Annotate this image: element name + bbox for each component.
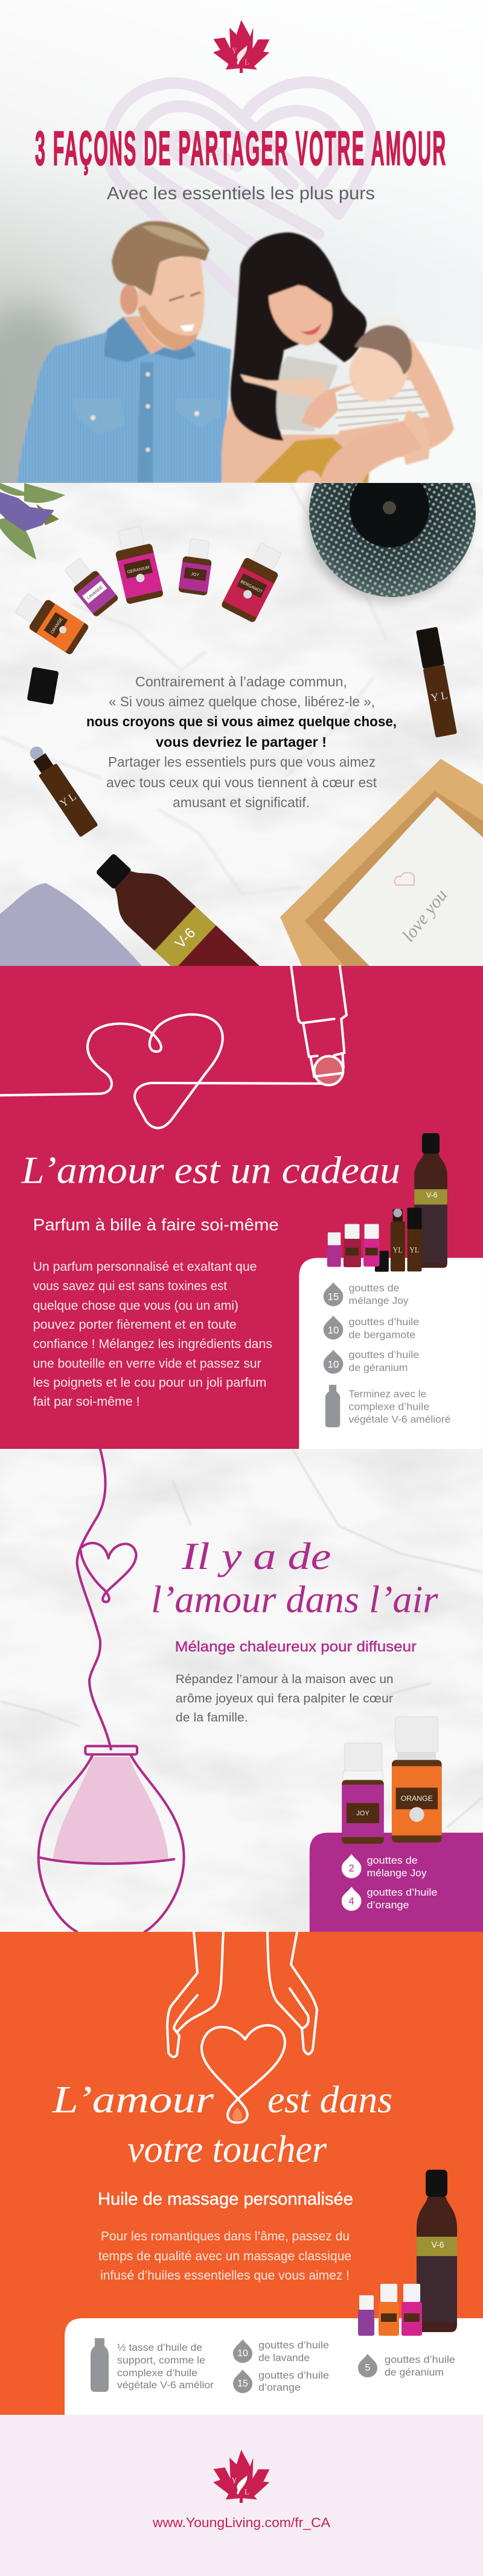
body text: arôme joyeux qui fera palpiter le cœur bbox=[176, 1692, 393, 1705]
roller bottle: left bbox=[30, 746, 98, 837]
recipe items: de lavande bbox=[258, 2353, 310, 2363]
body text: de la famille. bbox=[176, 1711, 248, 1725]
subheading: Parfum à bille à faire soi-même bbox=[33, 1215, 279, 1234]
drop: 10 bergamot: 10 bbox=[328, 1325, 339, 1336]
bottle: joy bbox=[342, 1743, 384, 1844]
bottle: geranium: GERANIUM bbox=[127, 566, 150, 575]
body text: les poignets et le cou pour un joli parfum bbox=[33, 1376, 266, 1390]
panel: hero bbox=[0, 20, 483, 483]
icon: bottle bbox=[325, 1385, 340, 1427]
recipe items: mélange Joy bbox=[367, 1867, 427, 1879]
line art: heart and roller bbox=[0, 966, 347, 1128]
body text: Un parfum personnalisé et exaltant que bbox=[33, 1260, 257, 1274]
intro text: vous devriez le partager ! bbox=[156, 734, 327, 750]
drop: 10 bergamot bbox=[324, 1315, 343, 1340]
drop: 10 geranium: 10 bbox=[328, 1358, 339, 1370]
body text bbox=[176, 1673, 394, 1725]
body text: quelque chose que vous (ou un ami) bbox=[33, 1299, 238, 1312]
panel: marble flat lay bbox=[0, 483, 483, 966]
roller bottle: right: Y L bbox=[430, 689, 449, 704]
products: V-6 bbox=[431, 2240, 444, 2249]
white pillow bbox=[338, 341, 483, 483]
icon: maple leaf logo bbox=[213, 2450, 269, 2503]
wooden tray: love you bbox=[398, 886, 452, 945]
recipe items: mélange Joy bbox=[349, 1295, 409, 1306]
drop: 15 bbox=[233, 2370, 252, 2393]
baby bbox=[240, 325, 430, 483]
recipe items: d’orange bbox=[367, 1899, 409, 1911]
recipe items: d’orange bbox=[258, 2382, 301, 2393]
bottle: geranium bbox=[116, 526, 163, 604]
drop: 10 geranium bbox=[324, 1350, 343, 1374]
recipe items: gouttes d’huile bbox=[258, 2370, 329, 2381]
roller cap bbox=[27, 667, 59, 705]
body text: Répandez l’amour à la maison avec un bbox=[176, 1673, 394, 1686]
intro text: Partager les essentiels purs que vous aimez bbox=[108, 754, 376, 770]
heading: est dans bbox=[267, 2078, 392, 2121]
decorative heart outline bbox=[108, 82, 372, 293]
icon: bottle bbox=[91, 2338, 109, 2392]
line art: hands and heart bbox=[167, 1932, 317, 2123]
drop: 5: 5 bbox=[365, 2363, 371, 2373]
recipe items: support, comme le bbox=[117, 2355, 205, 2366]
drop: 10: 10 bbox=[237, 2348, 248, 2359]
body text: fait par soi-même ! bbox=[33, 1395, 140, 1409]
body text: une bouteille en verre vide et passez sur bbox=[33, 1357, 261, 1370]
recipe items bbox=[342, 1854, 437, 1911]
body text bbox=[33, 1260, 272, 1409]
body text: confiance ! Mélangez les ingrédients dans bbox=[33, 1337, 272, 1351]
subheading: Huile de massage personnalisée bbox=[98, 2190, 353, 2209]
recipe card bbox=[299, 1258, 483, 1449]
icon: maple leaf logo: L bbox=[245, 2488, 249, 2496]
body text: temps de qualité avec un massage classique bbox=[98, 2249, 351, 2263]
icon: maple leaf logo: Y bbox=[232, 46, 237, 55]
panel: il y a de l'amour dans l'air bbox=[0, 1449, 483, 1932]
drop: 15: 15 bbox=[237, 2379, 248, 2389]
body text: infusé d’huiles essentielles que vous aimez ! bbox=[100, 2269, 350, 2283]
drop: 10 bbox=[233, 2339, 252, 2363]
recipe items: végétale V-6 amélioré bbox=[349, 1414, 450, 1425]
drop: 4 bbox=[342, 1887, 361, 1911]
recipe card bbox=[65, 2318, 483, 2415]
recipe items: gouttes d’huile bbox=[385, 2354, 455, 2365]
recipe items: de bergamote bbox=[349, 1329, 415, 1340]
bottle: joy: JOY bbox=[191, 572, 200, 578]
heading: l’amour dans l’air bbox=[151, 1577, 438, 1620]
bottle: orange: ORANGE bbox=[50, 617, 64, 634]
bottle: orange bbox=[16, 593, 88, 654]
bottle: bergamot bbox=[222, 543, 281, 622]
icon: maple leaf logo: Y bbox=[232, 2476, 237, 2485]
intro text: amusant et significatif. bbox=[173, 794, 310, 810]
decorative veins bbox=[0, 1449, 483, 1828]
recipe items: gouttes de bbox=[349, 1282, 400, 1294]
body text: pouvez porter fièrement et en toute bbox=[33, 1318, 237, 1332]
panel: footer bbox=[0, 2415, 483, 2576]
subtitle: Avec les essentiels les plus purs bbox=[107, 184, 375, 203]
icon: maple leaf logo bbox=[213, 20, 269, 73]
products bbox=[327, 1133, 447, 1272]
recipe items: complexe d’huile bbox=[117, 2368, 197, 2379]
intro text: Contrairement à l’adage commun, bbox=[135, 674, 347, 689]
heading: L’amour bbox=[52, 2078, 214, 2121]
recipe items: gouttes de bbox=[367, 1855, 418, 1866]
body text bbox=[98, 2229, 351, 2283]
bottle: orange: ORANGE bbox=[401, 1794, 433, 1803]
panel: l'amour est un cadeau bbox=[0, 966, 483, 1449]
website url: www.YoungLiving.com/fr_CA bbox=[152, 2515, 330, 2530]
recipe items bbox=[91, 2338, 455, 2393]
products: V-6 bbox=[426, 1191, 438, 1200]
body text: vous savez qui est sans toxines est bbox=[33, 1279, 227, 1293]
bottle: bergamot: BERGAMOT bbox=[240, 580, 263, 595]
recipe items: gouttes d’huile bbox=[349, 1316, 419, 1328]
towel bbox=[0, 883, 142, 966]
intro text: « Si vous aimez quelque chose, libérez-le », bbox=[109, 694, 375, 709]
bottle: joy: JOY bbox=[356, 1810, 369, 1817]
heading: Il y a de bbox=[181, 1535, 331, 1577]
drop: 15 bbox=[324, 1282, 343, 1306]
heading bbox=[52, 2078, 392, 2170]
man bbox=[17, 221, 231, 483]
body text: Pour les romantiques dans l’âme, passez du bbox=[101, 2229, 350, 2243]
v-6 bottle: V-6 bbox=[172, 925, 199, 952]
woman bbox=[222, 232, 454, 483]
decorative veins bbox=[0, 483, 386, 893]
wooden tray bbox=[280, 759, 483, 966]
recipe items: de géranium bbox=[385, 2367, 444, 2378]
heading: L’amour est un cadeau bbox=[21, 1149, 400, 1192]
recipe items: ½ tasse d’huile de bbox=[117, 2342, 202, 2353]
line art: diffuser and heart bbox=[39, 1449, 184, 1932]
roller bottle: right bbox=[416, 627, 457, 738]
drop: 5 bbox=[358, 2354, 377, 2377]
drop: 4: 4 bbox=[349, 1896, 354, 1907]
products: YL bbox=[393, 1245, 403, 1254]
diffuser bbox=[302, 483, 476, 607]
title: 3 FAÇONS DE PARTAGER VOTRE AMOUR bbox=[35, 121, 446, 175]
drop: 2: 2 bbox=[349, 1863, 354, 1874]
icon: maple leaf logo: L bbox=[245, 58, 249, 66]
plant: lavender and sage bbox=[0, 483, 65, 560]
heading bbox=[153, 1542, 438, 1612]
recipe items: gouttes d’huile bbox=[367, 1887, 437, 1898]
bottle: orange bbox=[392, 1717, 442, 1843]
heading: votre toucher bbox=[127, 2127, 327, 2170]
recipe items: gouttes d’huile bbox=[349, 1349, 419, 1360]
recipe card bbox=[310, 1833, 483, 1932]
products: YL bbox=[409, 1245, 419, 1254]
intro text: nous croyons que si vous aimez quelque chose, bbox=[86, 714, 397, 729]
bottle: lavender bbox=[65, 558, 118, 616]
photo: family bbox=[17, 221, 483, 483]
roller bottle: left: Y L bbox=[57, 790, 78, 810]
drop: 15: 15 bbox=[328, 1291, 339, 1303]
bottle: lavender: LAVANDE bbox=[86, 585, 104, 601]
products bbox=[358, 2170, 457, 2336]
recipe items: gouttes d’huile bbox=[258, 2340, 329, 2351]
panel: l'amour est dans votre toucher bbox=[0, 1932, 483, 2415]
drop: 2 bbox=[342, 1854, 361, 1878]
bottle: joy bbox=[178, 538, 214, 596]
recipe items: de géranium bbox=[349, 1362, 408, 1373]
recipe items bbox=[324, 1282, 450, 1427]
v-6 bottle bbox=[97, 854, 260, 966]
recipe items: complexe d’huile bbox=[349, 1401, 429, 1413]
intro text: avec tous ceux qui vous tiennent à cœur est bbox=[106, 775, 377, 790]
recipe items: végétale V-6 amélior bbox=[117, 2380, 214, 2391]
recipe items: Terminez avec le bbox=[349, 1388, 426, 1399]
subheading: Mélange chaleureux pour diffuseur bbox=[175, 1639, 417, 1655]
intro text bbox=[86, 674, 397, 810]
